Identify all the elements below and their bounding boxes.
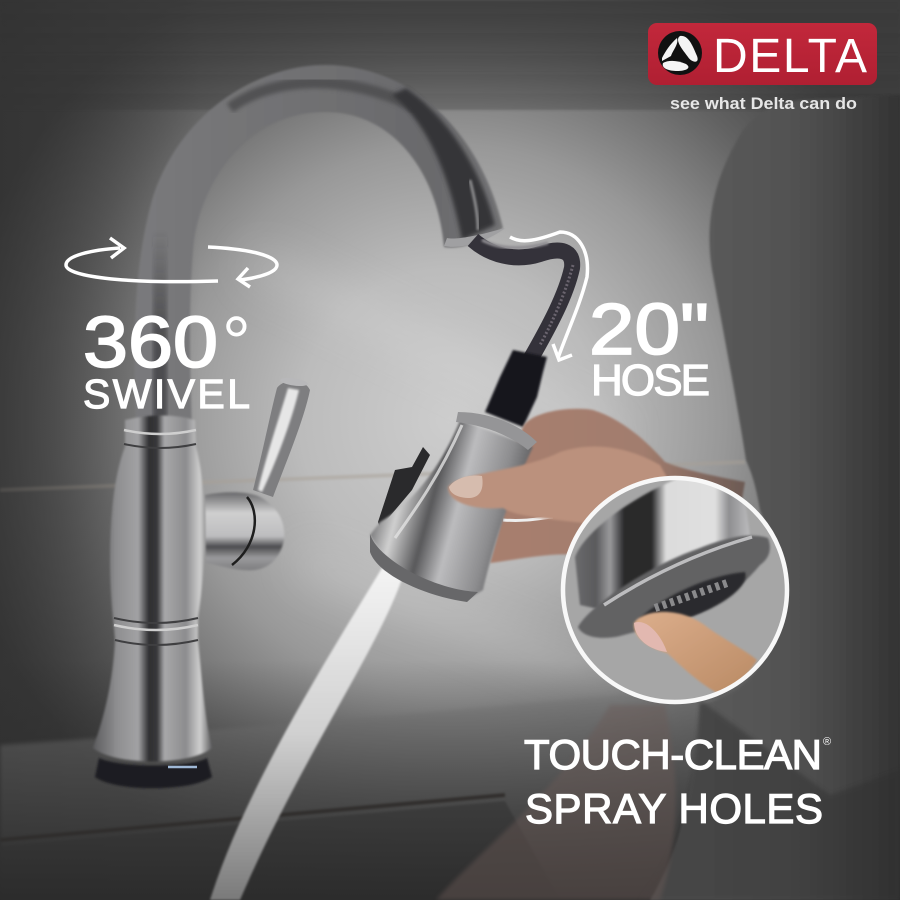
- lever handle: [205, 377, 310, 570]
- 360 degree swivel label: °: [222, 303, 251, 383]
- icon: delta triangle mark: [658, 31, 702, 75]
- water stream: [210, 568, 403, 900]
- thumbnail: [449, 475, 483, 498]
- callout circle: touch-clean spray holes: [563, 470, 787, 702]
- countertop: [0, 660, 900, 900]
- fingertip: [634, 612, 757, 693]
- 20 inch hose label: [589, 290, 710, 405]
- touch-clean spray holes label: [524, 731, 831, 832]
- pull-down sprayer head: [370, 412, 537, 602]
- touch-clean spray holes label: SPRAY HOLES: [525, 785, 823, 832]
- Delta logo: [648, 23, 877, 113]
- gooseneck spout: [135, 65, 505, 430]
- rim: [578, 536, 770, 638]
- thumb over sprayer: [448, 446, 680, 530]
- hose: [473, 240, 573, 427]
- swivel arrows icon: [66, 238, 277, 287]
- black hose connector: [485, 350, 547, 427]
- faucet: [93, 65, 505, 788]
- person's grey sweater: [650, 95, 900, 900]
- handle hub: [205, 492, 284, 570]
- 20 inch hose label: HOSE: [591, 356, 710, 405]
- base body: [93, 416, 212, 762]
- lower hand in background: [436, 705, 676, 900]
- hand holding sprayer: [490, 409, 745, 590]
- metal cap: [575, 470, 750, 610]
- 360 degree swivel label: SWIVEL: [83, 371, 250, 417]
- sleeve cuff shading: [640, 700, 900, 900]
- touch-clean spray holes label: TOUCH-CLEAN: [524, 731, 822, 778]
- 360 degree swivel label: [83, 303, 251, 417]
- hose length arrow: [510, 232, 587, 360]
- 360 degree swivel label: 360: [83, 303, 218, 383]
- spray holes: [640, 571, 747, 618]
- trigger: [378, 447, 430, 528]
- touch-clean spray holes label: ®: [823, 736, 831, 748]
- black base ring: [95, 758, 212, 788]
- 20 inch hose label: 20": [589, 290, 709, 370]
- Delta logo: DELTA: [713, 30, 867, 83]
- blue LED: [168, 766, 197, 768]
- Delta logo: see what Delta can do: [670, 94, 857, 113]
